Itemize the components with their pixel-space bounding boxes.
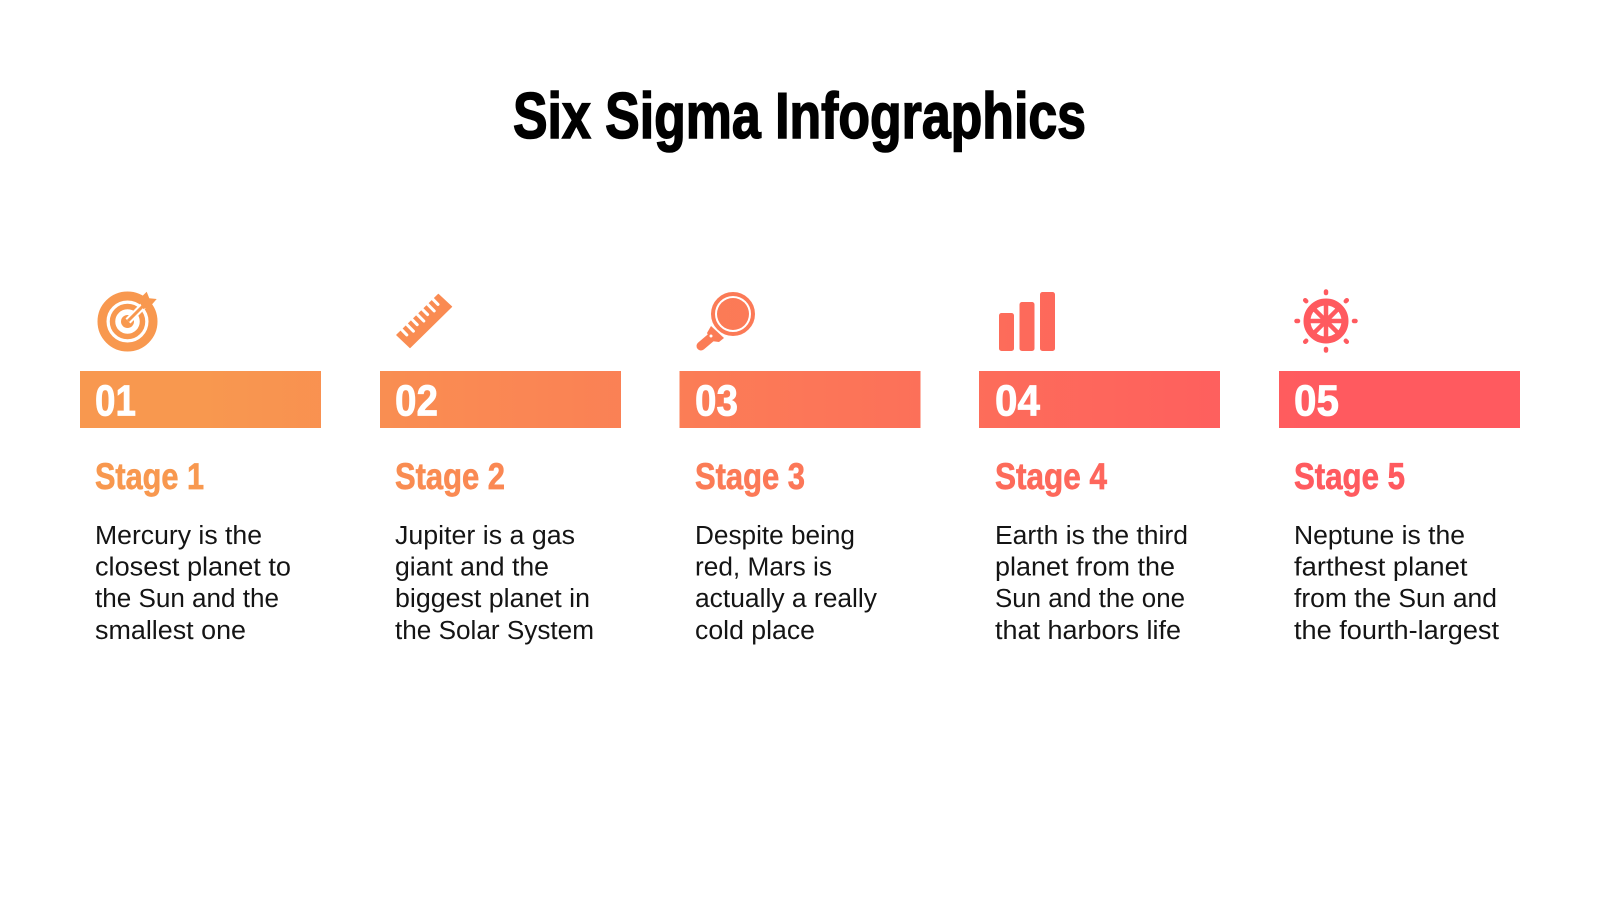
- text: stage 1 description: Mercury is the: [95, 522, 262, 550]
- panel: stage 4: [979, 292, 1220, 645]
- text: stage 5 description: from the Sun and: [1294, 585, 1497, 613]
- number bar 03: [680, 371, 920, 428]
- number bar 05: [1279, 371, 1520, 428]
- text: stage 4 description: planet from the: [995, 554, 1175, 582]
- icon: ruler: [397, 294, 452, 348]
- number bar 04: 04: [995, 376, 1040, 426]
- text: stage 1 description: smallest one: [95, 617, 246, 645]
- heading: stage 1: Stage 1: [95, 456, 204, 497]
- text: stage 1 description: closest planet to: [95, 554, 291, 582]
- number bar 02: [380, 371, 621, 428]
- panel: stage 5: [1279, 292, 1520, 645]
- number bar 02: 02: [395, 376, 438, 426]
- text: stage 1 description: the Sun and the: [95, 585, 279, 613]
- panel: stage 3: [680, 294, 920, 645]
- text: stage 2 description: giant and the: [395, 554, 549, 582]
- panel: stage 1: [80, 292, 321, 645]
- panel: stage 2: [380, 294, 621, 645]
- heading: stage 2: Stage 2: [395, 456, 505, 497]
- heading: stage 3: Stage 3: [695, 456, 805, 497]
- number bar 04: [979, 371, 1220, 428]
- number bar 01: [80, 371, 321, 428]
- icon: magnifier: [701, 294, 753, 346]
- text: stage 3 description: actually a really: [695, 585, 877, 613]
- text: stage 3 description: cold place: [695, 617, 815, 645]
- title: Six Sigma Infographics: [513, 79, 1086, 152]
- text: stage 5 description: Neptune is the: [1294, 522, 1465, 550]
- text: stage 2 description: biggest planet in: [395, 585, 590, 613]
- icon: ship wheel: [1296, 292, 1356, 350]
- icon: target: [102, 292, 157, 347]
- icon: bar chart: [999, 292, 1055, 351]
- text: stage 4 description: that harbors life: [995, 617, 1181, 645]
- text: stage 5 description: farthest planet: [1294, 554, 1468, 582]
- heading: stage 5: Stage 5: [1294, 456, 1405, 497]
- heading: stage 4: Stage 4: [995, 456, 1107, 497]
- text: stage 2 description: the Solar System: [395, 617, 594, 645]
- text: stage 5 description: the fourth-largest: [1294, 617, 1499, 645]
- text: stage 4 description: Sun and the one: [995, 585, 1185, 613]
- number bar 01: 01: [95, 376, 136, 426]
- number bar 05: 05: [1294, 376, 1339, 426]
- number bar 03: 03: [695, 376, 738, 426]
- text: stage 2 description: Jupiter is a gas: [395, 522, 575, 550]
- text: stage 4 description: Earth is the third: [995, 522, 1188, 550]
- text: stage 3 description: red, Mars is: [695, 554, 832, 582]
- text: stage 3 description: Despite being: [695, 522, 855, 550]
